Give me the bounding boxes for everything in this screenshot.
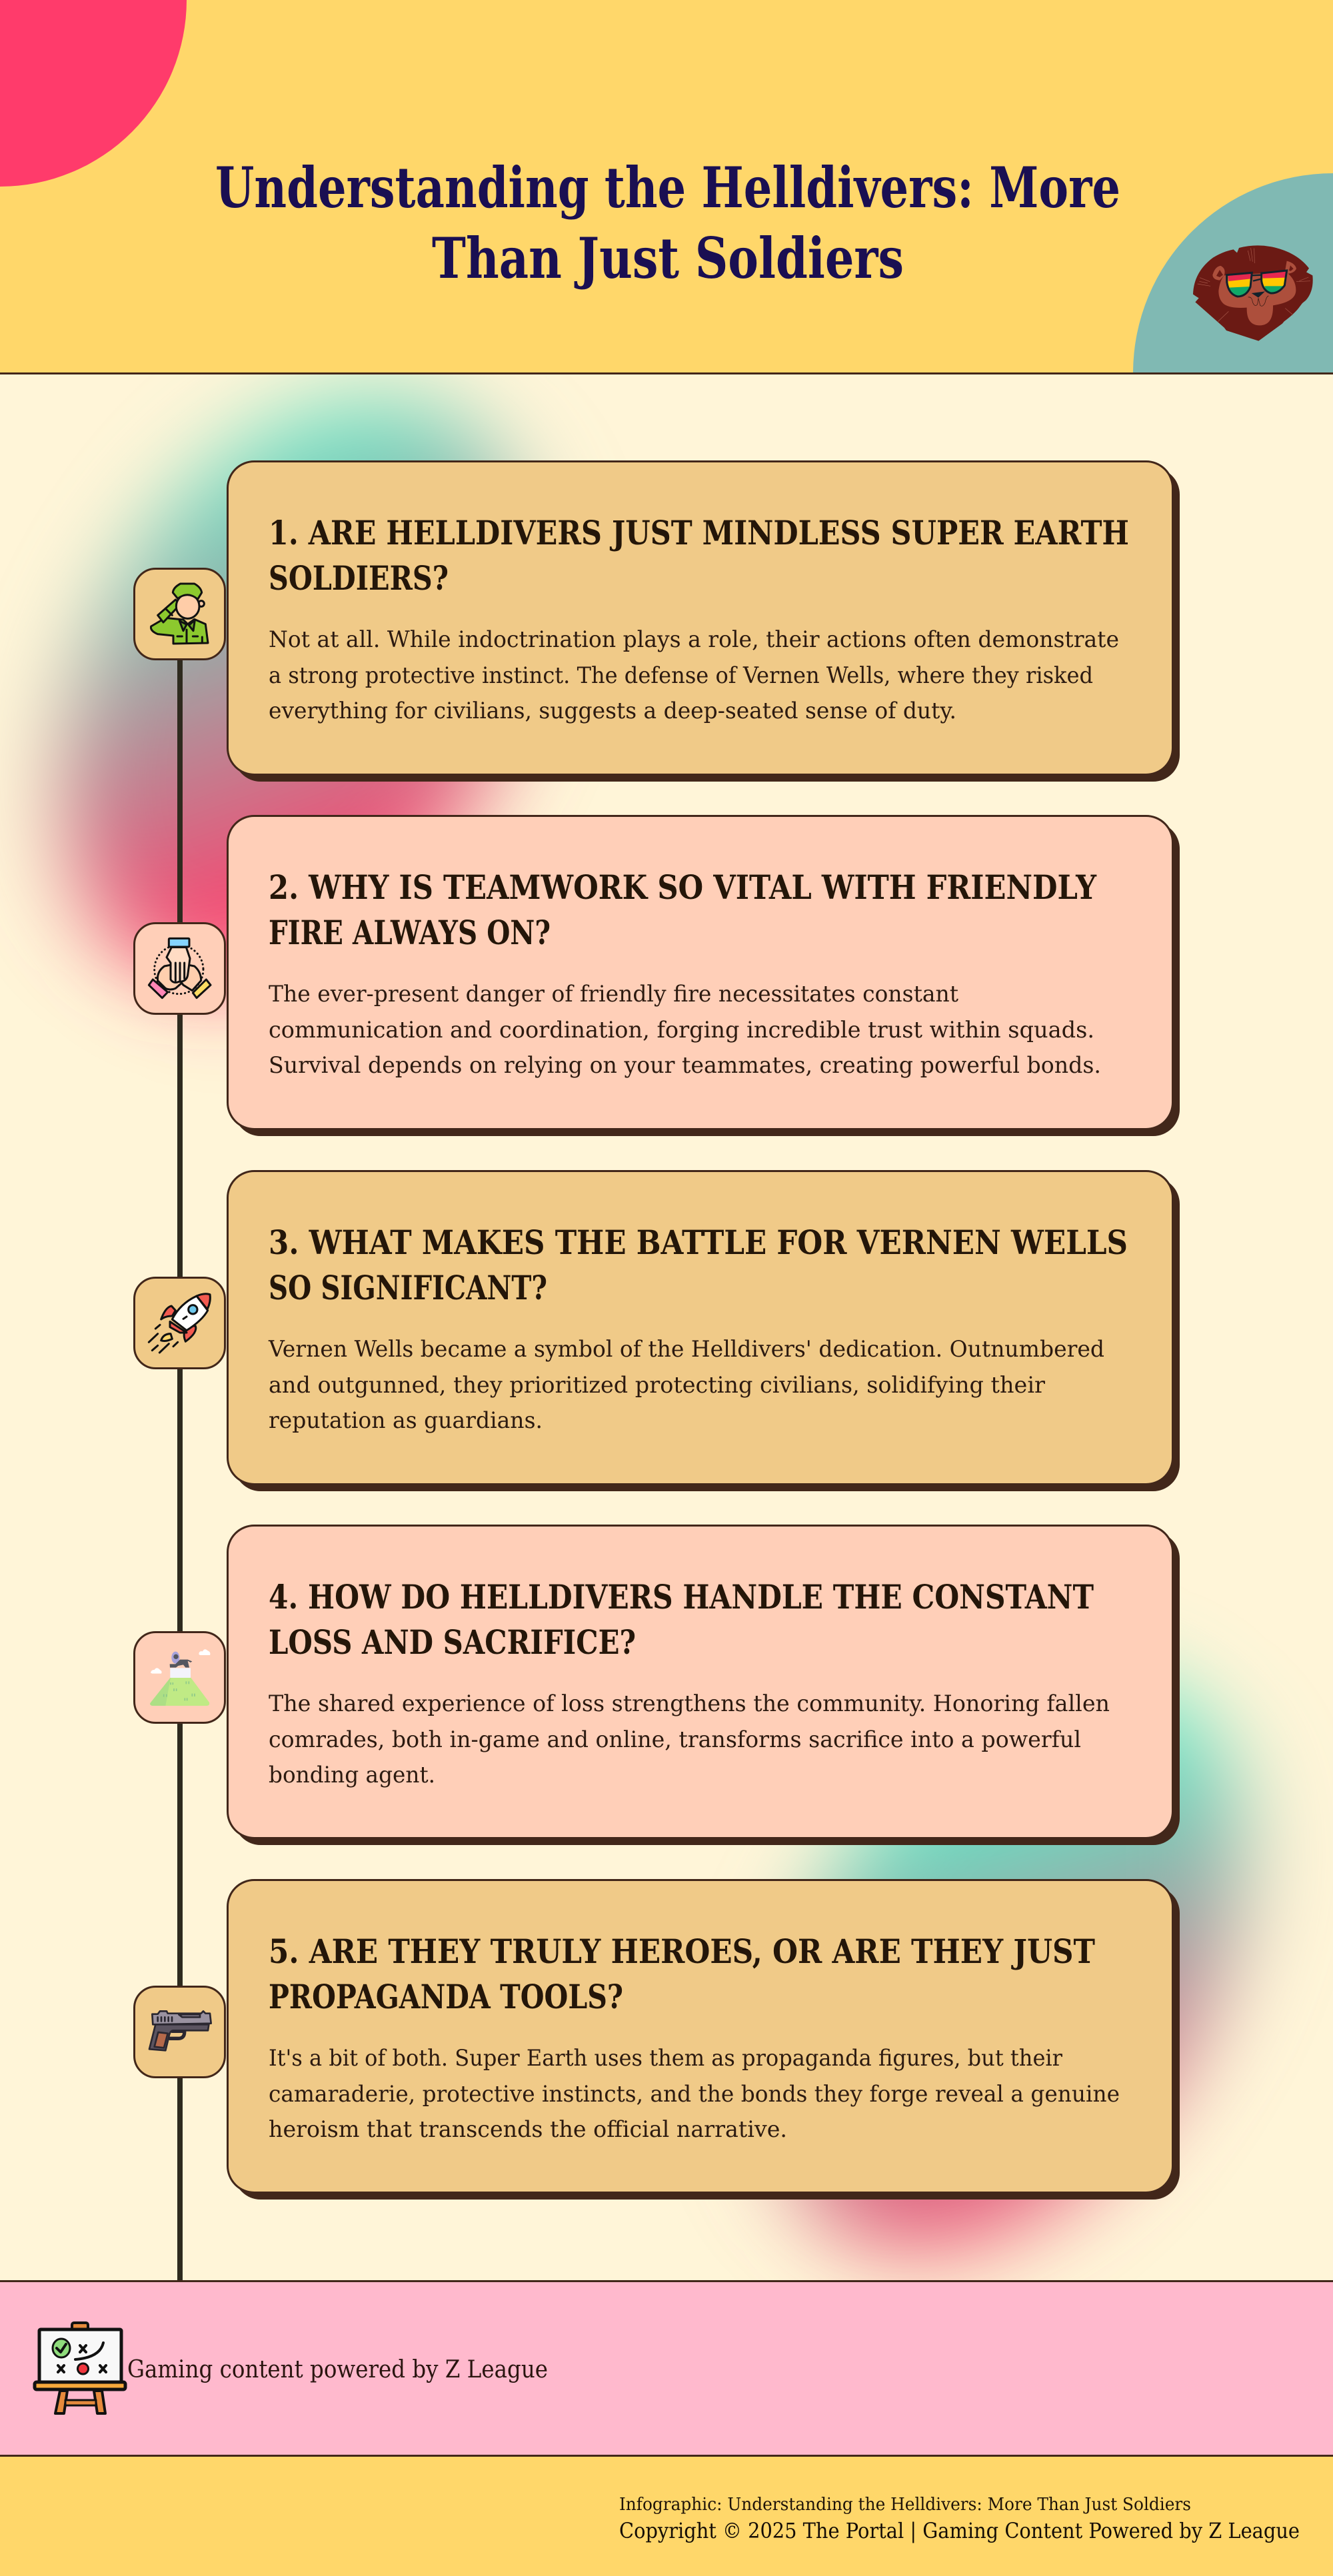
footer pink band xyxy=(0,2280,1333,2457)
main background xyxy=(0,374,1333,2281)
card 4 heading: LOSS AND SACRIFICE? xyxy=(269,1622,636,1662)
panel: card 3 xyxy=(228,1171,1180,1491)
icon: three joined hands xyxy=(135,924,225,1014)
timeline line xyxy=(177,656,183,2281)
card 4 body: comrades, both in-game and online, transforms sacrifice into a powerful xyxy=(269,1726,1081,1753)
card 1 body: a strong protective instinct. The defense of Vernen Wells, where they risked xyxy=(269,662,1093,689)
card 5 heading xyxy=(269,1932,1095,2016)
card 5 body: camaraderie, protective instincts, and the bonds they forge reveal a genuine xyxy=(269,2081,1120,2108)
card 3 body: and outgunned, they prioritized protecting civilians, solidifying their xyxy=(269,1372,1046,1399)
card 5 body: heroism that transcends the official narrative. xyxy=(269,2116,787,2143)
title xyxy=(215,155,1120,291)
panel: card 1 xyxy=(228,461,1180,782)
footer infographic credit: Infographic: Understanding the Helldivers: More Than Just Soldiers xyxy=(619,2495,1191,2515)
card 2 background xyxy=(228,816,1173,1129)
title: Understanding the Helldivers: More xyxy=(215,155,1120,221)
card 1 body: everything for civilians, suggests a deep-seated sense of duty. xyxy=(269,698,956,724)
card 2 heading xyxy=(269,868,1097,952)
card 4 background xyxy=(228,1526,1173,1838)
glow: top left gradient blob xyxy=(0,374,565,1055)
card 1 heading xyxy=(269,513,1129,598)
card 2 body: The ever-present danger of friendly fire necessitates constant xyxy=(269,981,958,1007)
panel: card 4 xyxy=(228,1526,1180,1845)
card 5 heading: PROPAGANDA TOOLS? xyxy=(269,1977,623,2016)
card 1 heading: 1. ARE HELLDIVERS JUST MINDLESS SUPER EARTH xyxy=(269,513,1129,552)
icon: strategy easel xyxy=(35,2323,125,2413)
panel: card 5 xyxy=(228,1880,1180,2200)
card 2 heading: 2. WHY IS TEAMWORK SO VITAL WITH FRIENDLY xyxy=(269,868,1097,907)
footer tagline: Gaming content powered by Z League xyxy=(127,2356,548,2383)
card 1 heading: SOLDIERS? xyxy=(269,558,449,598)
card 3 heading: 3. WHAT MAKES THE BATTLE FOR VERNEN WELLS xyxy=(269,1223,1128,1262)
card 2 body: Survival depends on relying on your teammates, creating powerful bonds. xyxy=(269,1052,1101,1079)
header panel xyxy=(0,0,1333,374)
card 5 body: It's a bit of both. Super Earth uses them as propaganda figures, but their xyxy=(269,2045,1063,2072)
footer yellow band xyxy=(0,2457,1333,2576)
card 4 heading: 4. HOW DO HELLDIVERS HANDLE THE CONSTANT xyxy=(269,1577,1094,1616)
card 3 background xyxy=(228,1171,1173,1485)
card 5 body xyxy=(269,2045,1120,2143)
glow: bottom right gradient blob xyxy=(738,1629,1305,2280)
card 4 body: bonding agent. xyxy=(269,1762,435,1788)
icon: lion with sunglasses xyxy=(1193,245,1313,341)
card 3 body: reputation as guardians. xyxy=(269,1407,543,1434)
icon: pistol xyxy=(135,1987,225,2078)
card 4 heading xyxy=(269,1577,1094,1662)
panel: card 2 xyxy=(228,816,1180,1136)
card 4 body xyxy=(269,1690,1110,1788)
card 2 body xyxy=(269,981,1101,1079)
card 1 body xyxy=(269,626,1119,724)
card 2 body: communication and coordination, forging incredible trust within squads. xyxy=(269,1017,1094,1043)
card 1 body: Not at all. While indoctrination plays a role, their actions often demonstrate xyxy=(269,626,1119,653)
title: Than Just Soldiers xyxy=(432,225,904,291)
card 5 heading: 5. ARE THEY TRULY HEROES, OR ARE THEY JUST xyxy=(269,1932,1095,1971)
icon: mountain with lion xyxy=(135,1632,225,1723)
icon: rocket xyxy=(135,1278,225,1369)
card 2 heading: FIRE ALWAYS ON? xyxy=(269,913,551,952)
card 5 background xyxy=(228,1880,1173,2192)
card 1 background xyxy=(228,461,1173,774)
card 3 heading xyxy=(269,1223,1128,1307)
card 3 body: Vernen Wells became a symbol of the Helldivers' dedication. Outnumbered xyxy=(268,1336,1104,1363)
decorative pink quarter circle xyxy=(0,0,187,187)
decorative teal quarter circle xyxy=(1133,173,1333,372)
card 4 body: The shared experience of loss strengthens the community. Honoring fallen xyxy=(269,1690,1110,1717)
icon: saluting soldier xyxy=(135,569,225,660)
card 3 body xyxy=(268,1336,1104,1434)
card 3 heading: SO SIGNIFICANT? xyxy=(269,1268,547,1307)
